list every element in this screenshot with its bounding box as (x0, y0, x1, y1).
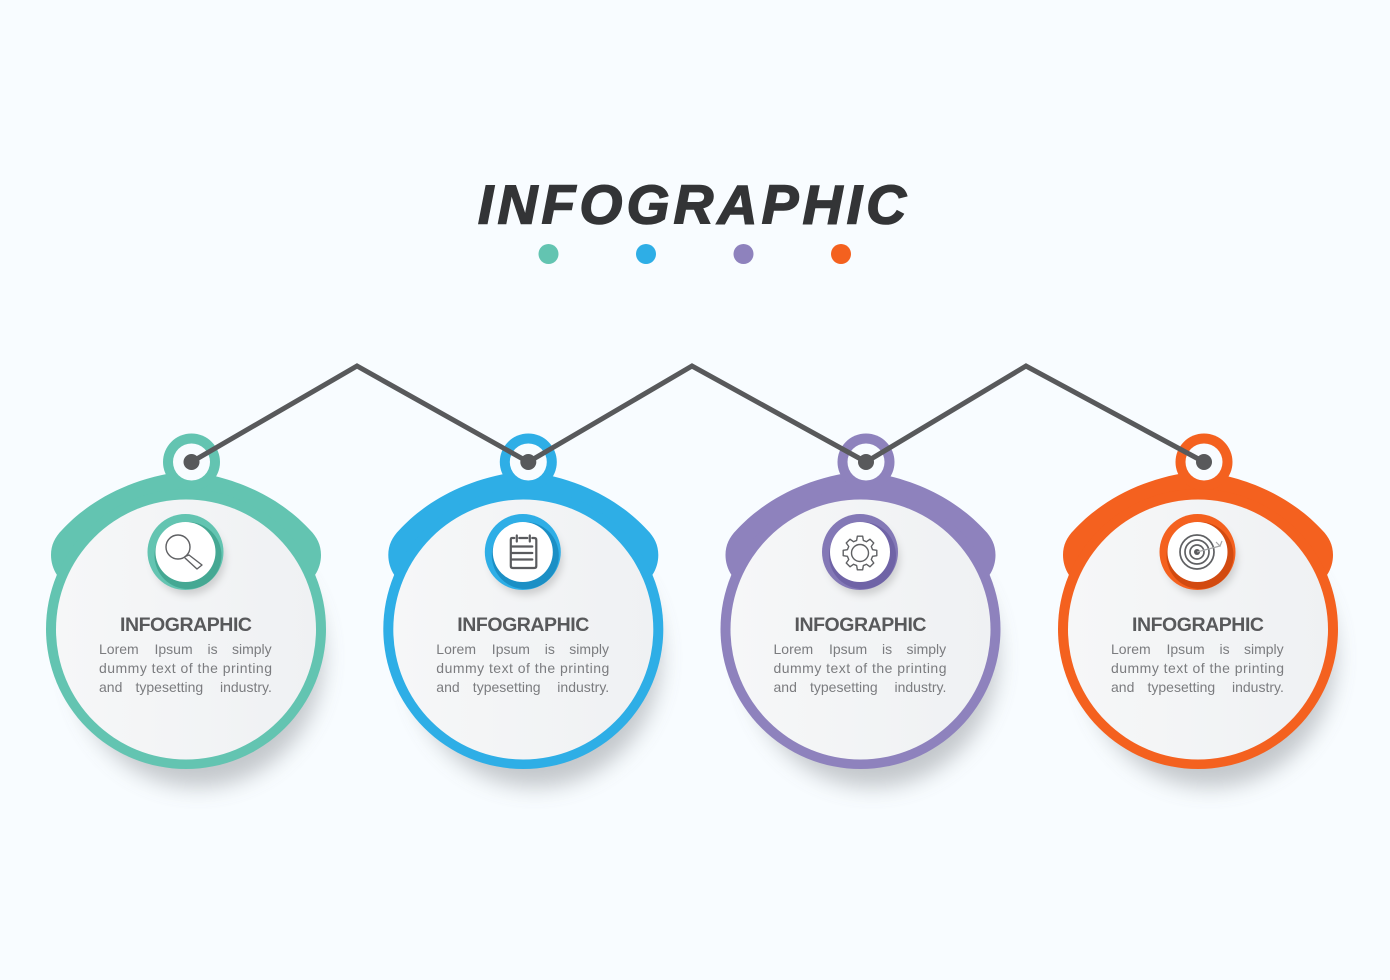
body text: and (99, 679, 122, 695)
body text: industry. (1232, 679, 1284, 695)
body text: Ipsum (1166, 641, 1205, 657)
body text: typesetting (1148, 679, 1215, 695)
body text: dummy text of the printing (774, 660, 946, 676)
card 3: settings (720, 434, 1000, 787)
body text: typesetting (810, 679, 878, 695)
body text: is (882, 641, 892, 657)
card 1: search (46, 434, 326, 787)
icon badge: gear (822, 514, 900, 595)
body text (774, 641, 946, 695)
legend dots (538, 244, 851, 264)
body text: dummy text of the printing (436, 660, 609, 676)
body text: and (436, 679, 460, 695)
body text: and (774, 679, 797, 695)
body text: Ipsum (154, 641, 193, 657)
body text: simply (1244, 641, 1284, 657)
body text: is (545, 641, 555, 657)
body text: simply (906, 641, 946, 657)
zigzag connector line (184, 366, 1212, 470)
body text: is (1220, 641, 1230, 657)
card 4: target (1058, 434, 1338, 787)
body text: typesetting (136, 679, 203, 695)
body text: dummy text of the printing (99, 660, 272, 676)
body text: simply (569, 641, 609, 657)
body text: Lorem (1111, 641, 1151, 657)
body text (436, 641, 609, 695)
heading: INFOGRAPHIC (457, 614, 589, 636)
heading: INFOGRAPHIC (1132, 614, 1264, 636)
body text: Ipsum (829, 641, 867, 657)
card 2: notes (383, 434, 663, 787)
body text: typesetting (473, 679, 541, 695)
icon badge: notepad (485, 514, 562, 595)
title: INFOGRAPHIC (478, 174, 907, 236)
heading: INFOGRAPHIC (120, 614, 252, 636)
body text (99, 641, 272, 695)
body text (1111, 641, 1284, 695)
body text: Lorem (436, 641, 476, 657)
body text: Ipsum (492, 641, 530, 657)
body text: simply (232, 641, 272, 657)
body text: Lorem (774, 641, 813, 657)
body text: industry. (220, 679, 272, 695)
body text: Lorem (99, 641, 139, 657)
heading: INFOGRAPHIC (794, 614, 926, 636)
body text: industry. (557, 679, 609, 695)
body text: industry. (894, 679, 946, 695)
body text: dummy text of the printing (1111, 660, 1284, 676)
icon badge: magnifier (148, 514, 225, 595)
icon badge: target (1160, 514, 1237, 595)
body text: and (1111, 679, 1134, 695)
body text: is (208, 641, 218, 657)
